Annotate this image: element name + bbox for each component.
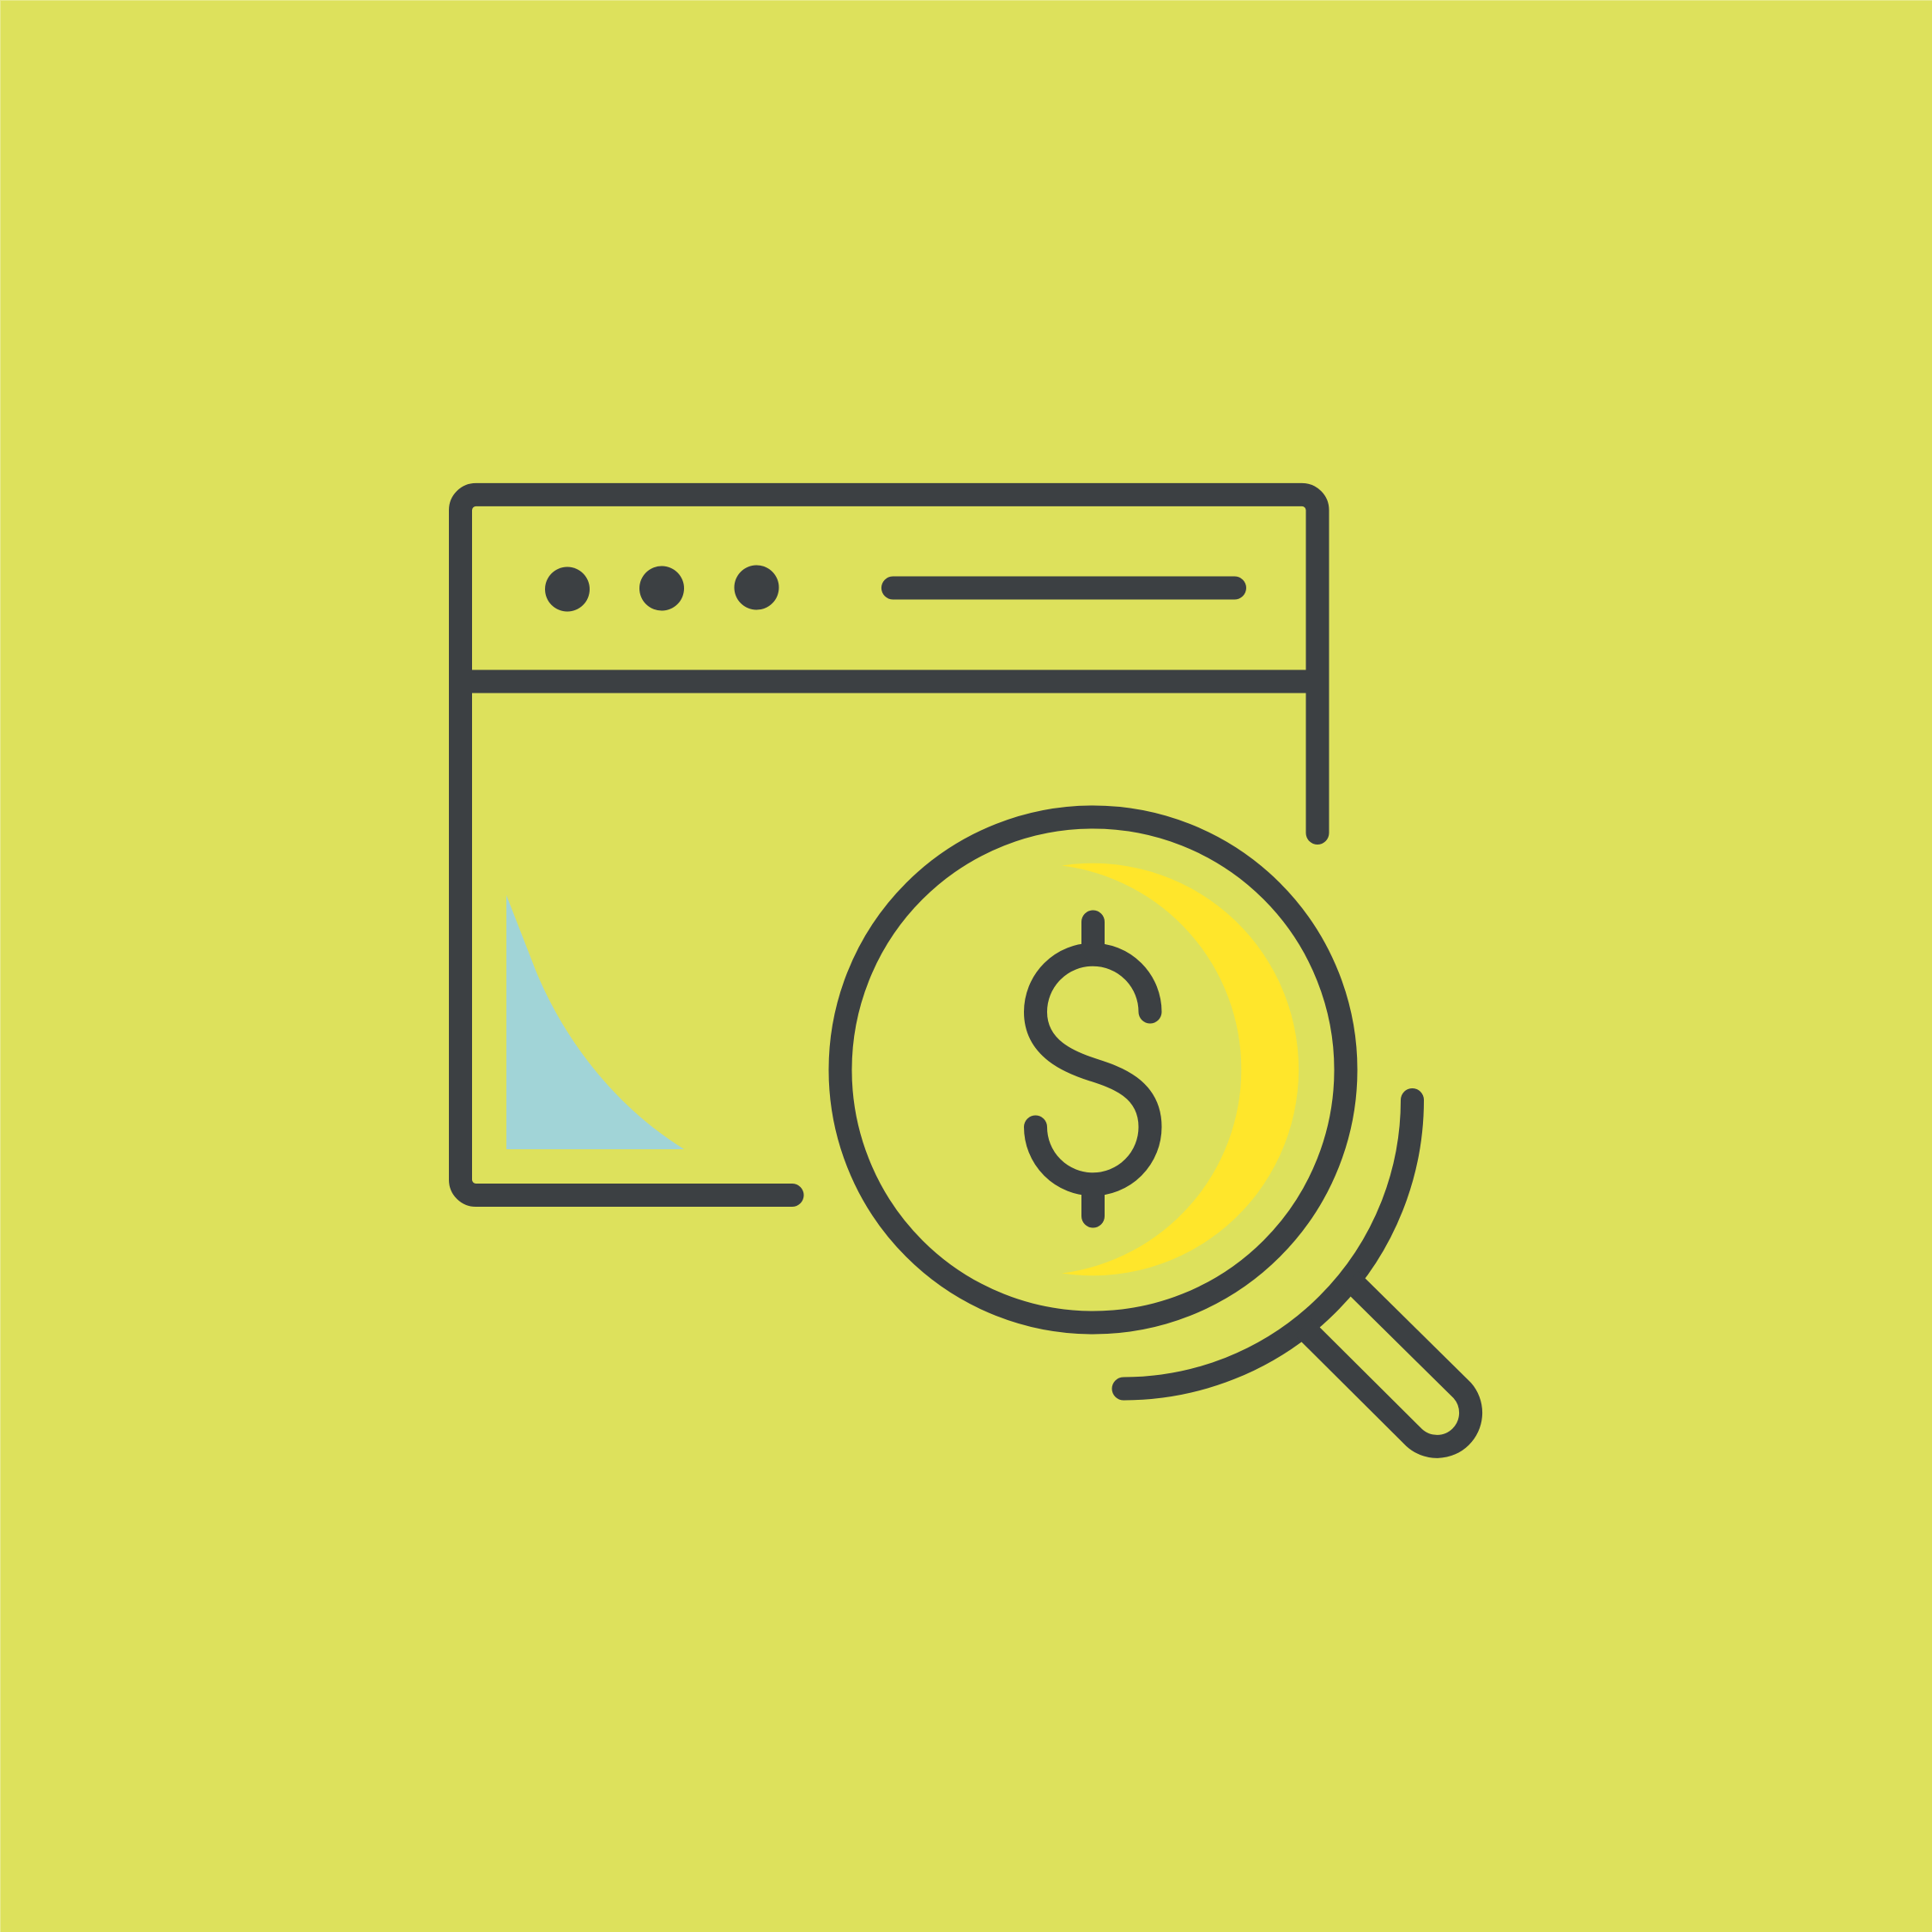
- dollar sign: [1035, 922, 1150, 1216]
- browser window: [460, 494, 1317, 1195]
- handle: [1303, 1280, 1471, 1446]
- window frame: [460, 494, 1317, 1195]
- blue chart area: [506, 895, 684, 1149]
- magnifying glass: [840, 817, 1471, 1446]
- yellow crescent highlight: [1062, 863, 1299, 1275]
- lens arc: [1123, 1100, 1413, 1389]
- address bar line: [893, 577, 1234, 599]
- window header divider: [460, 669, 1317, 693]
- coin circle: [840, 817, 1346, 1323]
- window control dots: [545, 565, 779, 611]
